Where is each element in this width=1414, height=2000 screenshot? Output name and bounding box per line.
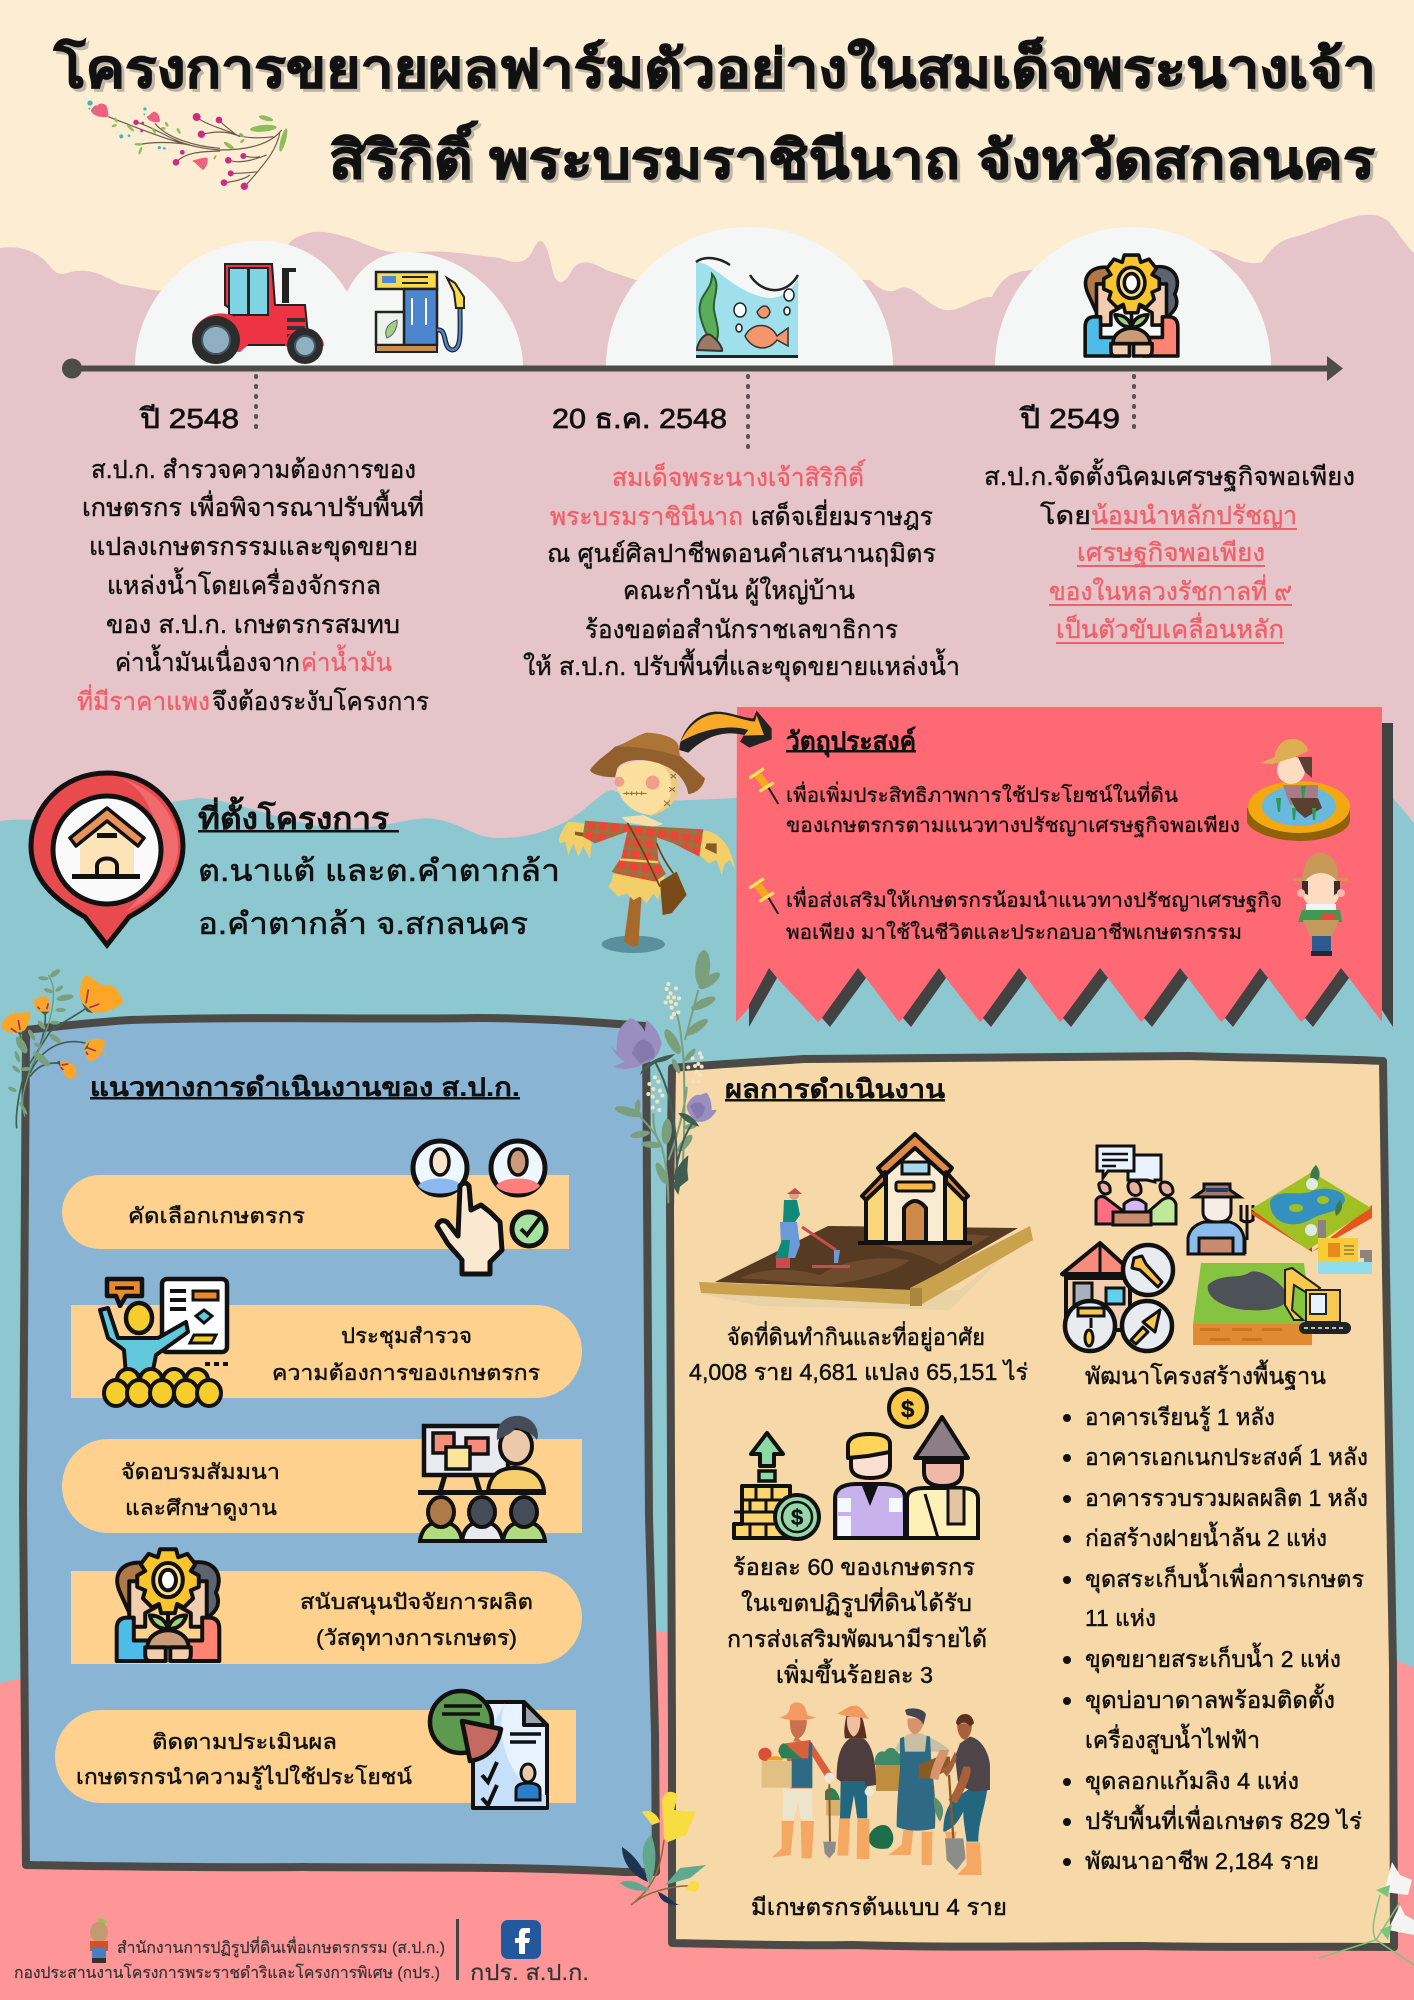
icon: support gear and seedling <box>117 1549 219 1661</box>
timeline item: 20 ธ.ค. 2548 <box>523 403 960 682</box>
icon: pond <box>1251 1165 1372 1252</box>
icon: fuel pump <box>376 272 464 352</box>
timeline item: ปี 2548: เกษตรกร เพื่อพิจารณาปรับพื้นที่ <box>82 489 424 522</box>
title: สิริกิติ์ พระบรมราชินีนาถ จังหวัดสกลนคร <box>329 121 1376 190</box>
income text: ร้อยละ 60 ของเกษตรกร <box>733 1554 975 1580</box>
location text: อ.คำตากล้า จ.สกลนคร <box>198 908 528 941</box>
step 4 pill: สนับสนุนปัจจัยการผลิต <box>71 1571 582 1664</box>
title: โครงการขยายผลฟาร์มตัวอย่างในสมเด็จพระนางเจ้า <box>56 40 1379 102</box>
timeline item: 20 ธ.ค. 2548: ณ ศูนย์ศิลปาชีพดอนคำเสนานฤมิตร <box>547 540 936 569</box>
timeline item: ปี 2548: ค่าน้ำมันเนื่องจาก <box>115 644 300 677</box>
title: โครงการขยายผลฟาร์มตัวอย่างในสมเด็จพระนางเจ้า <box>53 37 1376 99</box>
step 3 pill: จัดอบรมสัมมนา <box>62 1439 582 1533</box>
step 5 pill: ติดตามประเมินผล: ติดตามประเมินผล <box>152 1731 337 1754</box>
timeline item: ปี 2549: โดย <box>1040 501 1091 530</box>
infrastructure list: ขุดสระเก็บน้ำเพื่อการเกษตร <box>1085 1563 1364 1593</box>
location text: ที่ตั้งโครงการ <box>198 796 389 836</box>
land allocation text: 4,008 ราย 4,681 แปลง 65,151 ไร่ <box>689 1359 1028 1385</box>
icon: meeting presenter <box>100 1279 228 1406</box>
land allocation text <box>689 1321 1028 1385</box>
income text: ในเขตปฏิรูปที่ดินได้รับ <box>741 1587 972 1617</box>
icon: training <box>418 1416 546 1541</box>
timeline item: ปี 2548: ของ ส.ป.ก. เกษตรกรสมทบ <box>106 611 400 639</box>
timeline item: ปี 2549: ปี 2549 <box>1019 403 1120 434</box>
timeline item: ปี 2548: ปี 2548 <box>139 403 239 434</box>
timeline item: 20 ธ.ค. 2548: คณะกำนัน ผู้ใหญ่บ้าน <box>623 576 855 606</box>
infrastructure list: อาคารเอกเนกประสงค์ 1 หลัง <box>1085 1444 1368 1470</box>
icon: building repair tools <box>1062 1243 1173 1351</box>
icon: income increase coins: $ <box>791 1505 803 1530</box>
step 2 pill: ประชุมสำรวจ: ความต้องการของเกษตรกร <box>272 1362 540 1385</box>
icon: income increase coins <box>734 1433 819 1539</box>
footer: สำนักงานการปฏิรูปที่ดินเพื่อเกษตรกรรม (ส.ป.ก.) <box>117 1936 445 1958</box>
income text <box>727 1554 987 1688</box>
timeline item: 20 ธ.ค. 2548: สมเด็จพระนางเจ้าสิริกิติ์ <box>612 459 866 492</box>
location text <box>198 796 560 941</box>
objectives heading: วัตถุประสงค์ <box>786 726 916 758</box>
timeline item: ปี 2549: น้อมนำหลักปรัชญา <box>1091 502 1297 530</box>
icon: select farmer hand <box>413 1141 546 1274</box>
title <box>53 37 1379 193</box>
left panel: approach <box>23 1018 656 1872</box>
timeline item: ปี 2548 <box>77 403 429 716</box>
footer: กปร. ส.ป.ก. <box>470 1960 589 1985</box>
timeline item: 20 ธ.ค. 2548: 20 ธ.ค. 2548 <box>552 403 727 434</box>
location text: ต.นาแต้ และต.คำตากล้า <box>198 855 560 888</box>
illustration: four model farmers <box>758 1702 990 1875</box>
infrastructure list: อาคารเรียนรู้ 1 หลัง <box>1085 1404 1275 1431</box>
model farmers caption: มีเกษตรกรต้นแบบ 4 ราย <box>751 1894 1007 1920</box>
flowers: orange top-left <box>1 968 123 1128</box>
right panel: results <box>670 1056 1394 1947</box>
timeline item: ปี 2548: ค่าน้ำมัน <box>301 644 392 677</box>
infrastructure list: พัฒนาโครงสร้างพื้นฐาน <box>1085 1360 1326 1390</box>
timeline item: 20 ธ.ค. 2548: เสด็จเยี่ยมราษฎร <box>751 499 933 531</box>
flowers: white bottom right <box>1319 1862 1414 1965</box>
icon: water pump generator <box>1318 1220 1372 1274</box>
illustration: scarecrow <box>559 733 735 953</box>
icon: pushpin 1 <box>751 769 778 804</box>
icon: excavated pond <box>1193 1263 1351 1345</box>
icon: meeting people <box>1096 1146 1176 1225</box>
timeline item: ปี 2548: จึงต้องระงับโครงการ <box>212 687 429 716</box>
land allocation text: จัดที่ดินทำกินและที่อยู่อาศัย <box>727 1321 985 1351</box>
left panel heading: แนวทางการดำเนินงานของ ส.ป.ก. <box>90 1072 520 1102</box>
objective 2: เพื่อส่งเสริมให้เกษตรกรน้อมนำแนวทางปรัชญาเศรษฐกิจ <box>786 886 1282 912</box>
flowers: purple centre <box>612 949 723 1203</box>
step 5 pill: ติดตามประเมินผล: เกษตรกรนำความรู้ไปใช้ประโยชน์ <box>76 1765 412 1790</box>
objective 1 <box>786 781 1240 837</box>
infrastructure list: ขุดบ่อบาดาลพร้อมติดตั้ง <box>1085 1684 1335 1714</box>
infrastructure list: อาคารรวบรวมผลผลิต 1 หลัง <box>1085 1485 1368 1511</box>
step 3 pill: จัดอบรมสัมมนา: จัดอบรมสัมมนา <box>121 1461 280 1484</box>
timeline item: ปี 2549: เป็นตัวขับเคลื่อนหลัก <box>1056 612 1284 644</box>
timeline item: ปี 2549: ของในหลวงรัชกาลที่ ๙ <box>1049 574 1292 606</box>
infrastructure list: ปรับพื้นที่เพื่อเกษตร 829 ไร่ <box>1085 1805 1362 1834</box>
timeline item: 20 ธ.ค. 2548: ให้ ส.ป.ก. ปรับพื้นที่และขุดขยายแหล่งน้ำ <box>523 648 960 682</box>
infrastructure list <box>1063 1360 1368 1874</box>
step 3 pill: จัดอบรมสัมมนา: และศึกษาดูงาน <box>125 1497 277 1521</box>
income text: การส่งเสริมพัฒนามีรายได้ <box>727 1626 987 1652</box>
infrastructure list: ขุดขยายสระเก็บน้ำ 2 แห่ง <box>1085 1643 1341 1673</box>
icon: pushpin 2 <box>751 879 778 914</box>
timeline item: ปี 2549 <box>984 403 1355 644</box>
icon: tractor <box>192 264 324 364</box>
footer: กองประสานงานโครงการพระราชดำริและโครงการพิเศษ (กปร.) <box>14 1963 440 1982</box>
step 5 pill: ติดตามประเมินผล <box>55 1710 576 1803</box>
step 1 pill: คัดเลือกเกษตรกร: คัดเลือกเกษตรกร <box>128 1205 305 1228</box>
icon: curved arrow to objectives <box>679 711 772 753</box>
icon dome 1 and 2 <box>135 241 523 367</box>
objective 1: ของเกษตรกรตามแนวทางปรัชญาเศรษฐกิจพอเพียง <box>786 815 1240 837</box>
footer <box>14 1918 589 1985</box>
objective 1: เพื่อเพิ่มประสิทธิภาพการใช้ประโยชน์ในที่ดิน <box>786 781 1178 807</box>
right panel heading: ผลการดำเนินงาน <box>725 1074 945 1104</box>
background: salmon ground <box>0 1629 1414 2000</box>
infrastructure list: ก่อสร้างฝายน้ำล้น 2 แห่ง <box>1085 1522 1327 1551</box>
objectives panel <box>736 707 1393 1027</box>
timeline arrow <box>62 356 1343 381</box>
income text: เพิ่มขึ้นร้อยละ 3 <box>776 1659 933 1688</box>
icon: location pin with house <box>31 773 183 945</box>
illustration: farmer with vegetable basket <box>1293 853 1348 956</box>
icon: fish and water <box>696 258 798 358</box>
illustration: farmer planting rice on disc <box>1247 739 1350 841</box>
timeline item: ปี 2548: ส.ป.ก. สำรวจความต้องการของ <box>91 456 416 484</box>
step 2 pill: ประชุมสำรวจ <box>71 1305 582 1398</box>
timeline item: ปี 2548: แหล่งน้ำโดยเครื่องจักรกล <box>107 567 381 600</box>
timeline item: ปี 2548: ที่มีราคาแพง <box>77 684 210 716</box>
infrastructure list: ขุดลอกแก้มลิง 4 แห่ง <box>1085 1768 1299 1795</box>
objective 2: พอเพียง มาใช้ในชีวิตและประกอบอาชีพเกษตรกรรม <box>786 921 1242 944</box>
timeline item: ปี 2548: แปลงเกษตรกรรมและขุดขยาย <box>89 533 418 562</box>
step 1 pill: คัดเลือกเกษตรกร <box>62 1175 569 1249</box>
timeline item: ปี 2549: ส.ป.ก.จัดตั้งนิคมเศรษฐกิจพอเพียง <box>984 458 1355 491</box>
step 4 pill: สนับสนุนปัจจัยการผลิต: (วัสดุทางการเกษตร) <box>316 1627 517 1651</box>
icon: farmers income <box>833 1389 980 1540</box>
step 4 pill: สนับสนุนปัจจัยการผลิต: สนับสนุนปัจจัยการผลิต <box>300 1591 533 1615</box>
illustration: land plot with house and farmer <box>699 1134 1033 1310</box>
background: pink hills <box>0 215 1414 1000</box>
icon: people with gear and seedling <box>1085 255 1178 356</box>
icon: farmer with pitchfork <box>1188 1184 1253 1254</box>
infrastructure list: เครื่องสูบน้ำไฟฟ้า <box>1085 1724 1260 1754</box>
title: สิริกิติ์ พระบรมราชินีนาถ จังหวัดสกลนคร <box>332 124 1379 193</box>
infrastructure list: พัฒนาอาชีพ 2,184 ราย <box>1085 1848 1319 1874</box>
icon: pink flower branch <box>87 100 289 190</box>
timeline item: ปี 2549: เศรษฐกิจพอเพียง <box>1077 539 1265 567</box>
icon: farmers income: $ <box>901 1396 915 1423</box>
icon: evaluation document <box>430 1691 547 1808</box>
objective 2 <box>786 886 1282 944</box>
background: blue hills <box>0 790 1414 1720</box>
icon: facebook <box>501 1920 541 1959</box>
step 2 pill: ประชุมสำรวจ: ประชุมสำรวจ <box>341 1325 472 1349</box>
date dotted connectors <box>256 376 1134 452</box>
icon dome 4 <box>995 227 1271 367</box>
infrastructure list: 11 แห่ง <box>1085 1605 1156 1631</box>
timeline item: 20 ธ.ค. 2548: ร้องขอต่อสำนักราชเลขาธิการ <box>585 616 898 644</box>
timeline item: 20 ธ.ค. 2548: พระบรมราชินีนาถ <box>550 503 743 531</box>
flowers: yellow bottom <box>620 1792 706 1905</box>
icon dome 3 <box>606 227 893 367</box>
icon: mascot <box>90 1918 108 1963</box>
